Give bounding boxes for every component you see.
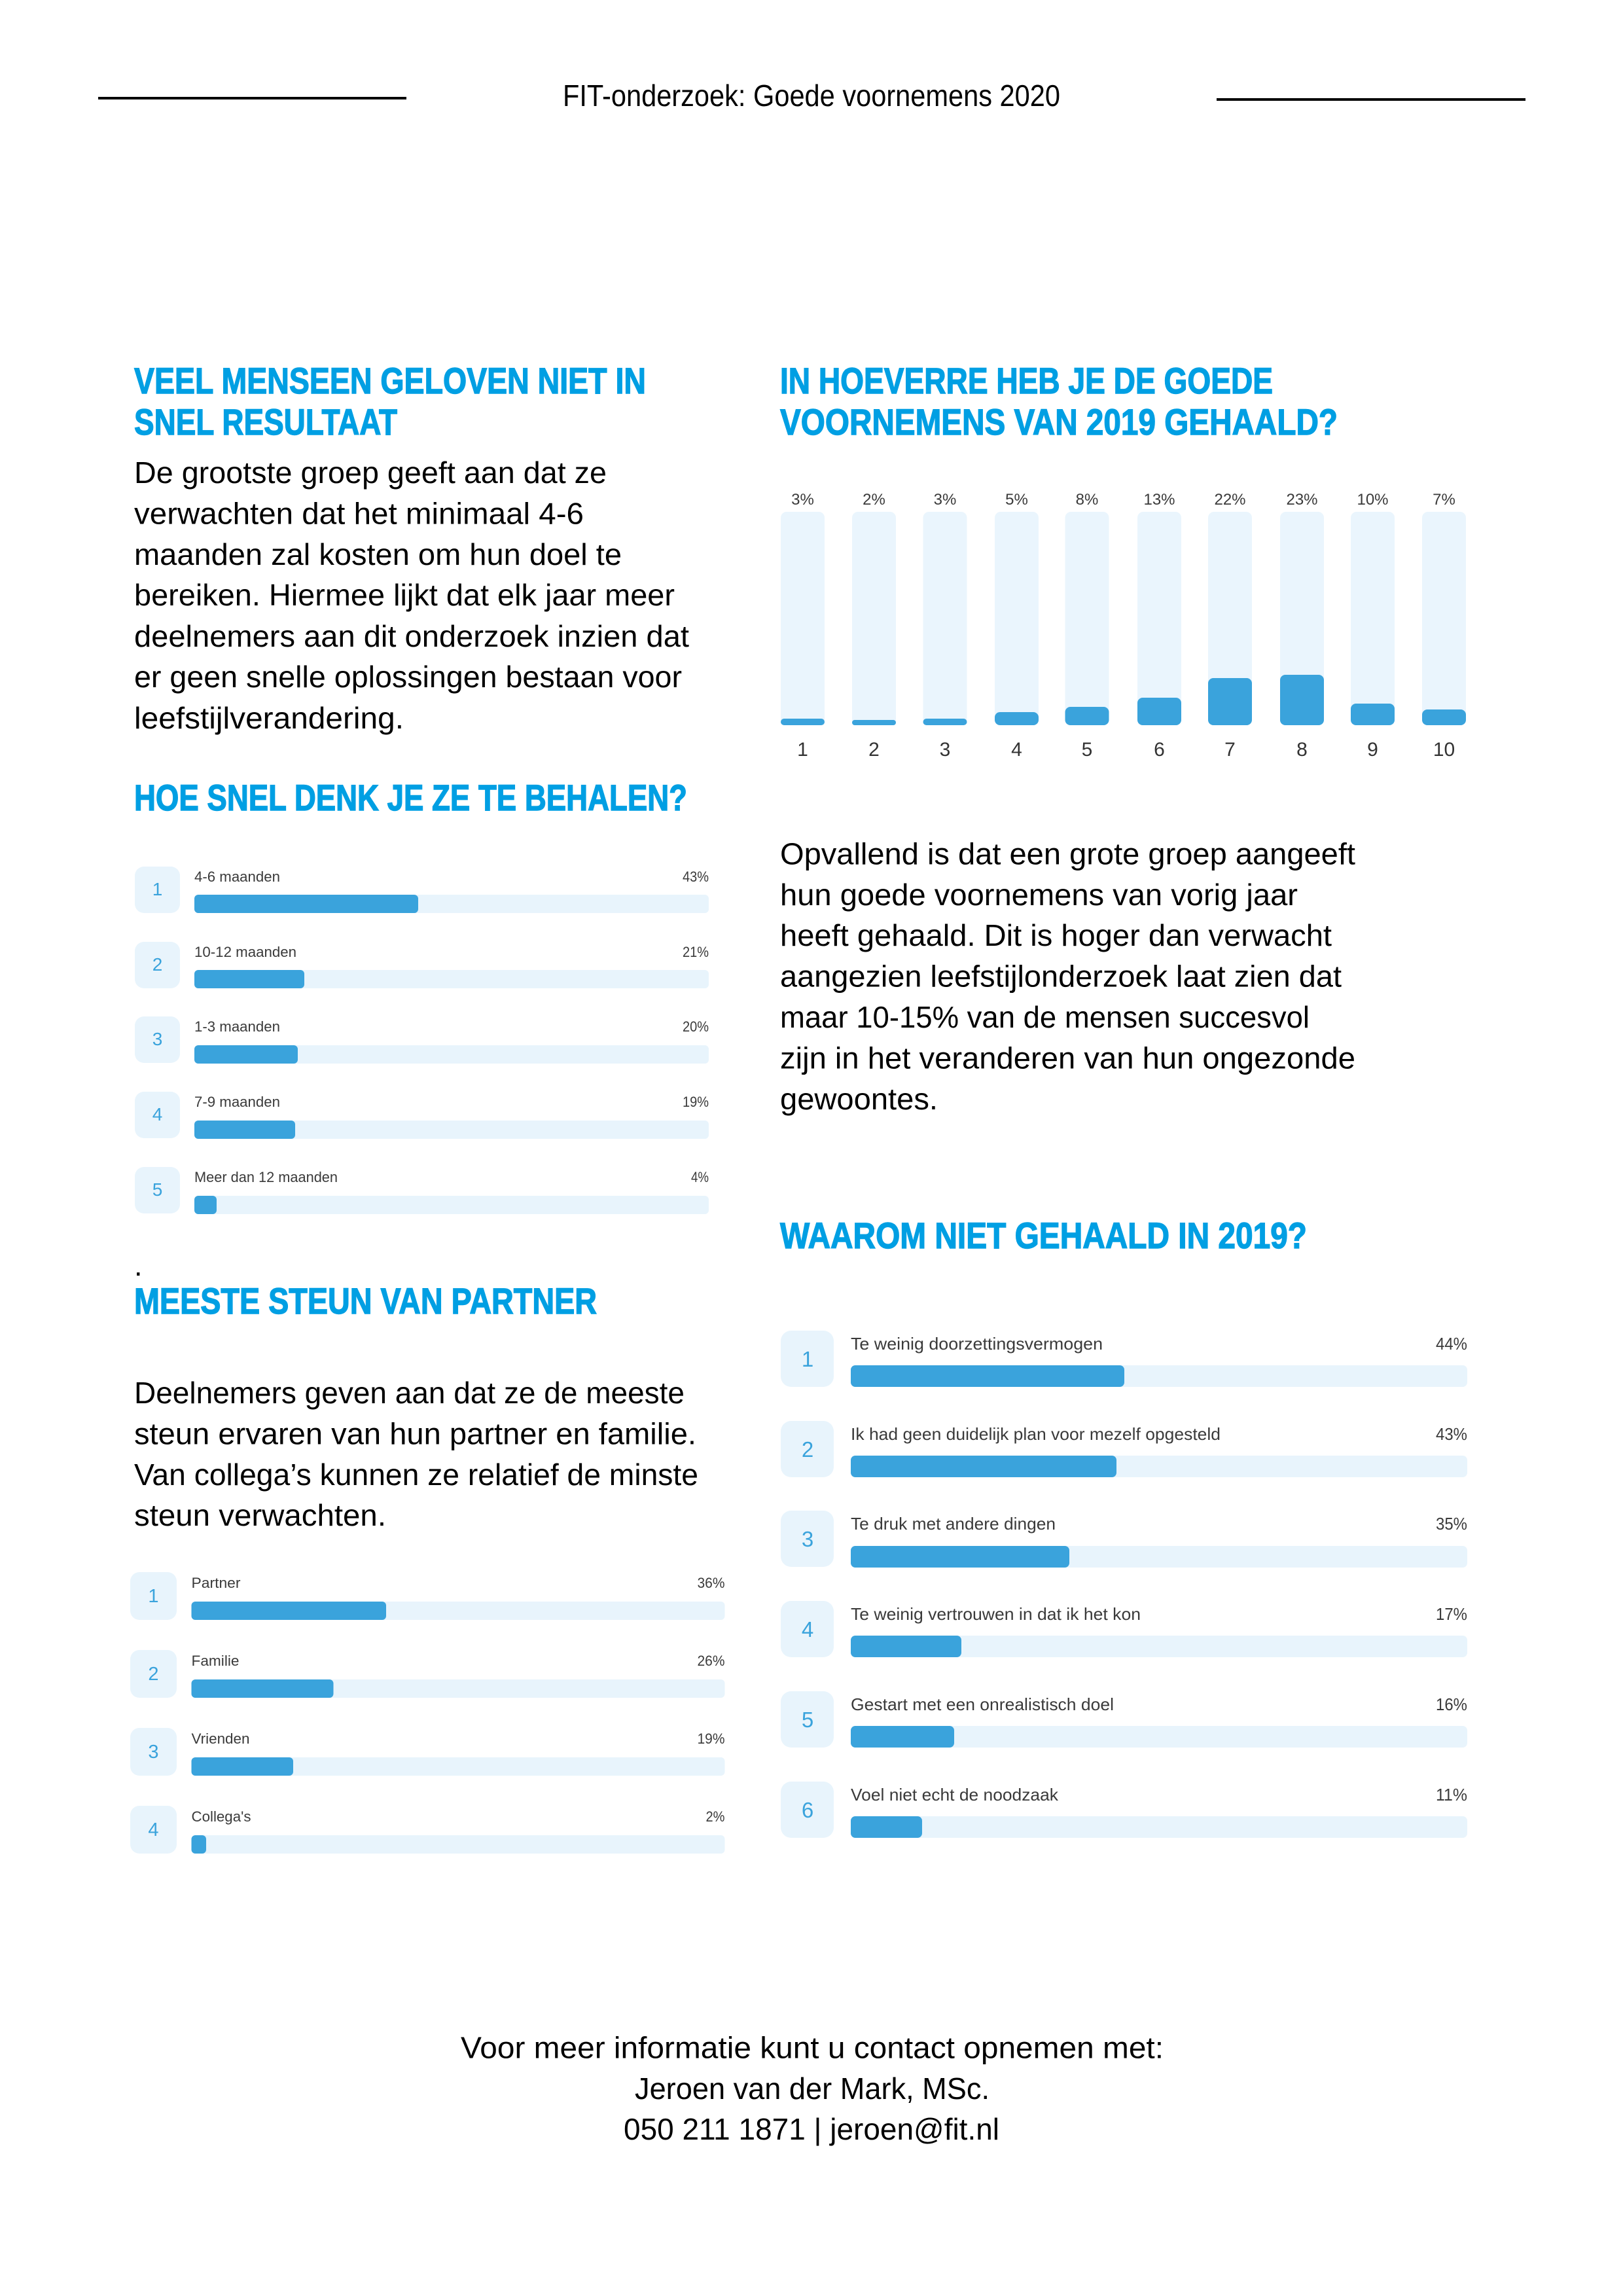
row: 1-3 maanden 20%: 20% <box>683 1018 709 1035</box>
column 10: 7% <box>1422 491 1466 761</box>
row: vrienden 19%: 3 <box>148 1742 159 1763</box>
text block: opvallend: gewoontes. <box>780 1082 938 1116</box>
column 6: 13%: 13% <box>1143 491 1175 509</box>
heading: meeste steun van partner: MEESTE STEUN VAN PARTNER <box>134 1280 597 1321</box>
column 6: 13%: 6 <box>1154 739 1165 761</box>
row: 7-9 maanden 19%: 7-9 maanden <box>194 1094 280 1110</box>
header: FIT-onderzoek: Goede voornemens 2020 <box>563 79 1060 113</box>
column 2: 2%: 2 <box>868 739 880 761</box>
row: 4-6 maanden 43%: 1 <box>152 879 162 899</box>
text block: opvallend <box>780 836 1355 1116</box>
row: partner 36%: 1 <box>148 1586 159 1607</box>
row: te druk 35%: Te druk met andere dingen <box>851 1514 1056 1534</box>
row: 1-3 maanden 20%: 1-3 maanden <box>194 1018 280 1035</box>
row: collega's 2%: 2% <box>705 1808 725 1825</box>
heading: hoe snel denk je ze te behalen: HOE SNEL DENK JE ZE TE BEHALEN? <box>134 777 687 818</box>
row: te weinig vertrouwen 17%: Te weinig vertrouwen in dat ik het kon <box>851 1604 1141 1624</box>
column 7: 22%: 7 <box>1224 739 1236 761</box>
row: 10-12 maanden 21%: 2 <box>152 954 162 975</box>
row: te druk 35%: 35% <box>1436 1514 1467 1534</box>
text block: opvallend: aangezien leefstijlonderzoek laat zien dat <box>780 960 1342 994</box>
row: 1-3 maanden 20% <box>135 1016 709 1064</box>
heading: in hoeverre gehaald <box>780 360 1338 442</box>
row: te weinig vertrouwen 17%: 17% <box>1436 1604 1467 1624</box>
text block: verwachting resultaat: deelnemers aan dit onderzoek inzien dat <box>134 619 689 653</box>
column 9: 10%: 9 <box>1367 739 1378 761</box>
column 4: 5%: 4 <box>1011 739 1022 761</box>
text block: steun: steun verwachten. <box>134 1498 386 1532</box>
text block: verwachting resultaat <box>134 456 689 735</box>
column 3: 3% <box>923 491 967 761</box>
row: vrienden 19%: Vrienden <box>191 1731 250 1747</box>
column 9: 10% <box>1351 491 1395 761</box>
column 5: 8%: 5 <box>1082 739 1092 761</box>
column 2: 2%: 2% <box>863 491 885 509</box>
text block: opvallend: hun goede voornemens van vorig jaar <box>780 878 1298 912</box>
row: meer dan 12 maanden 4%: Meer dan 12 maanden <box>194 1169 338 1185</box>
row: geen duidelijk plan 43%: Ik had geen duidelijk plan voor mezelf opgesteld <box>851 1424 1221 1444</box>
column 1: 3%: 1 <box>797 739 808 761</box>
row: collega's 2%: Collega's <box>191 1808 251 1825</box>
text block: steun: Van collega’s kunnen ze relatief de minste <box>134 1458 698 1492</box>
row: collega's 2%: 4 <box>148 1820 159 1840</box>
row: 10-12 maanden 21%: 10-12 maanden <box>194 944 296 960</box>
row: familie 26%: 2 <box>148 1664 159 1685</box>
column 4: 5%: 5% <box>1005 491 1028 509</box>
column 1: 3% <box>781 491 825 761</box>
row: te weinig doorzettingsvermogen 44%: 1 <box>802 1347 813 1371</box>
row: noodzaak 11% <box>781 1782 1467 1838</box>
column 4: 5% <box>995 491 1039 761</box>
row: te weinig vertrouwen 17%: 4 <box>802 1617 813 1641</box>
row: geen duidelijk plan 43%: 2 <box>802 1437 813 1462</box>
row: onrealistisch doel 16%: 16% <box>1436 1695 1467 1714</box>
heading: veel mensen geloven niet in snel resultaat <box>134 360 646 442</box>
bar chart: waarom niet gehaald <box>781 1331 1467 1838</box>
text block: opvallend: Opvallend is dat een grote groep aangeeft <box>780 836 1355 870</box>
text block: verwachting resultaat: bereiken. Hiermee lijkt dat elk jaar meer <box>134 578 675 612</box>
row: meer dan 12 maanden 4%: 5 <box>152 1179 162 1200</box>
row: partner 36%: Partner <box>191 1575 241 1591</box>
text block: opvallend: maar 10-15% van de mensen succesvol <box>780 1000 1310 1034</box>
row: 7-9 maanden 19%: 19% <box>683 1094 709 1110</box>
row: collega's 2% <box>130 1806 725 1854</box>
row: onrealistisch doel 16%: Gestart met een onrealistisch doel <box>851 1695 1114 1714</box>
text block: verwachting resultaat: De grootste groep geeft aan dat ze <box>134 456 607 490</box>
column 8: 23% <box>1280 491 1324 761</box>
row: 10-12 maanden 21%: 21% <box>683 944 709 960</box>
footer contact: 050 211 1871 | jeroen@fit.nl <box>624 2112 999 2146</box>
column 10: 7%: 10 <box>1433 739 1455 761</box>
column 7: 22%: 22% <box>1214 491 1246 509</box>
row: geen duidelijk plan 43%: 43% <box>1436 1424 1467 1444</box>
row: te weinig doorzettingsvermogen 44%: Te weinig doorzettingsvermogen <box>851 1334 1103 1354</box>
row: familie 26% <box>130 1650 725 1698</box>
column 8: 23%: 8 <box>1296 739 1308 761</box>
column 10: 7%: 7% <box>1433 491 1455 509</box>
column 5: 8% <box>1065 491 1109 761</box>
row: te weinig doorzettingsvermogen 44% <box>781 1331 1467 1387</box>
row: 7-9 maanden 19% <box>135 1092 709 1139</box>
row: te druk 35% <box>781 1511 1467 1568</box>
column 7: 22% <box>1208 491 1252 761</box>
column 5: 8%: 8% <box>1076 491 1098 509</box>
footer contact <box>461 2030 1164 2146</box>
column 1: 3%: 3% <box>791 491 814 509</box>
row: geen duidelijk plan 43% <box>781 1421 1467 1477</box>
heading: in hoeverre gehaald: VOORNEMENS VAN 2019 GEHAALD? <box>780 401 1338 442</box>
bar chart: hoe snel te behalen <box>135 867 709 1214</box>
row: partner 36% <box>130 1572 725 1620</box>
row: 7-9 maanden 19%: 4 <box>152 1104 162 1124</box>
text block: verwachting resultaat: er geen snelle oplossingen bestaan voor <box>134 660 682 694</box>
text block: steun: steun ervaren van hun partner en familie. <box>134 1416 696 1450</box>
footer contact: Jeroen van der Mark, MSc. <box>635 2072 990 2106</box>
heading: veel mensen geloven niet in snel resultaat: SNEL RESULTAAT <box>134 401 397 442</box>
stray dot: . <box>134 1249 143 1282</box>
column 8: 23%: 23% <box>1286 491 1318 509</box>
row: te druk 35%: 3 <box>802 1527 813 1551</box>
row: 4-6 maanden 43%: 43% <box>683 869 709 885</box>
row: noodzaak 11%: Voel niet echt de noodzaak <box>851 1785 1059 1804</box>
row: familie 26%: 26% <box>698 1653 725 1669</box>
bar chart: steun <box>130 1572 725 1854</box>
heading: waarom niet gehaald: WAAROM NIET GEHAALD IN 2019? <box>780 1215 1307 1256</box>
header <box>98 79 1525 113</box>
row: 10-12 maanden 21% <box>135 942 709 988</box>
text block: steun <box>134 1376 698 1532</box>
column 2: 2% <box>852 491 896 761</box>
column 3: 3%: 3 <box>940 739 950 761</box>
footer contact: Voor meer informatie kunt u contact opnemen met: <box>461 2030 1164 2064</box>
row: vrienden 19% <box>130 1728 725 1776</box>
row: familie 26%: Familie <box>191 1653 240 1669</box>
column 6: 13% <box>1137 491 1181 761</box>
row: noodzaak 11%: 6 <box>802 1798 813 1822</box>
row: noodzaak 11%: 11% <box>1436 1785 1467 1804</box>
row: te weinig doorzettingsvermogen 44%: 44% <box>1436 1334 1467 1354</box>
row: 1-3 maanden 20%: 3 <box>152 1029 162 1049</box>
text block: verwachting resultaat: leefstijlverandering. <box>134 701 404 735</box>
column chart: score 1 tot 10 <box>781 491 1466 761</box>
row: meer dan 12 maanden 4%: 4% <box>691 1169 709 1185</box>
heading: veel mensen geloven niet in snel resultaat: VEEL MENSEEN GELOVEN NIET IN <box>134 360 646 401</box>
text block: verwachting resultaat: maanden zal kosten om hun doel te <box>134 537 622 571</box>
text block: opvallend: heeft gehaald. Dit is hoger dan verwacht <box>780 918 1332 952</box>
row: onrealistisch doel 16%: 5 <box>802 1708 813 1732</box>
heading: in hoeverre gehaald: IN HOEVERRE HEB JE DE GOEDE <box>780 360 1273 401</box>
text block: verwachting resultaat: verwachten dat het minimaal 4-6 <box>134 496 584 530</box>
row: onrealistisch doel 16% <box>781 1691 1467 1748</box>
row: vrienden 19%: 19% <box>698 1731 725 1747</box>
row: 4-6 maanden 43%: 4-6 maanden <box>194 869 280 885</box>
row: meer dan 12 maanden 4% <box>135 1167 709 1214</box>
row: partner 36%: 36% <box>698 1575 725 1591</box>
row: te weinig vertrouwen 17% <box>781 1601 1467 1657</box>
text block: steun: Deelnemers geven aan dat ze de meeste <box>134 1376 685 1410</box>
text block: opvallend: zijn in het veranderen van hun ongezonde <box>780 1041 1355 1075</box>
column 3: 3%: 3% <box>934 491 956 509</box>
row: 4-6 maanden 43% <box>135 867 709 913</box>
column 9: 10%: 10% <box>1357 491 1389 509</box>
